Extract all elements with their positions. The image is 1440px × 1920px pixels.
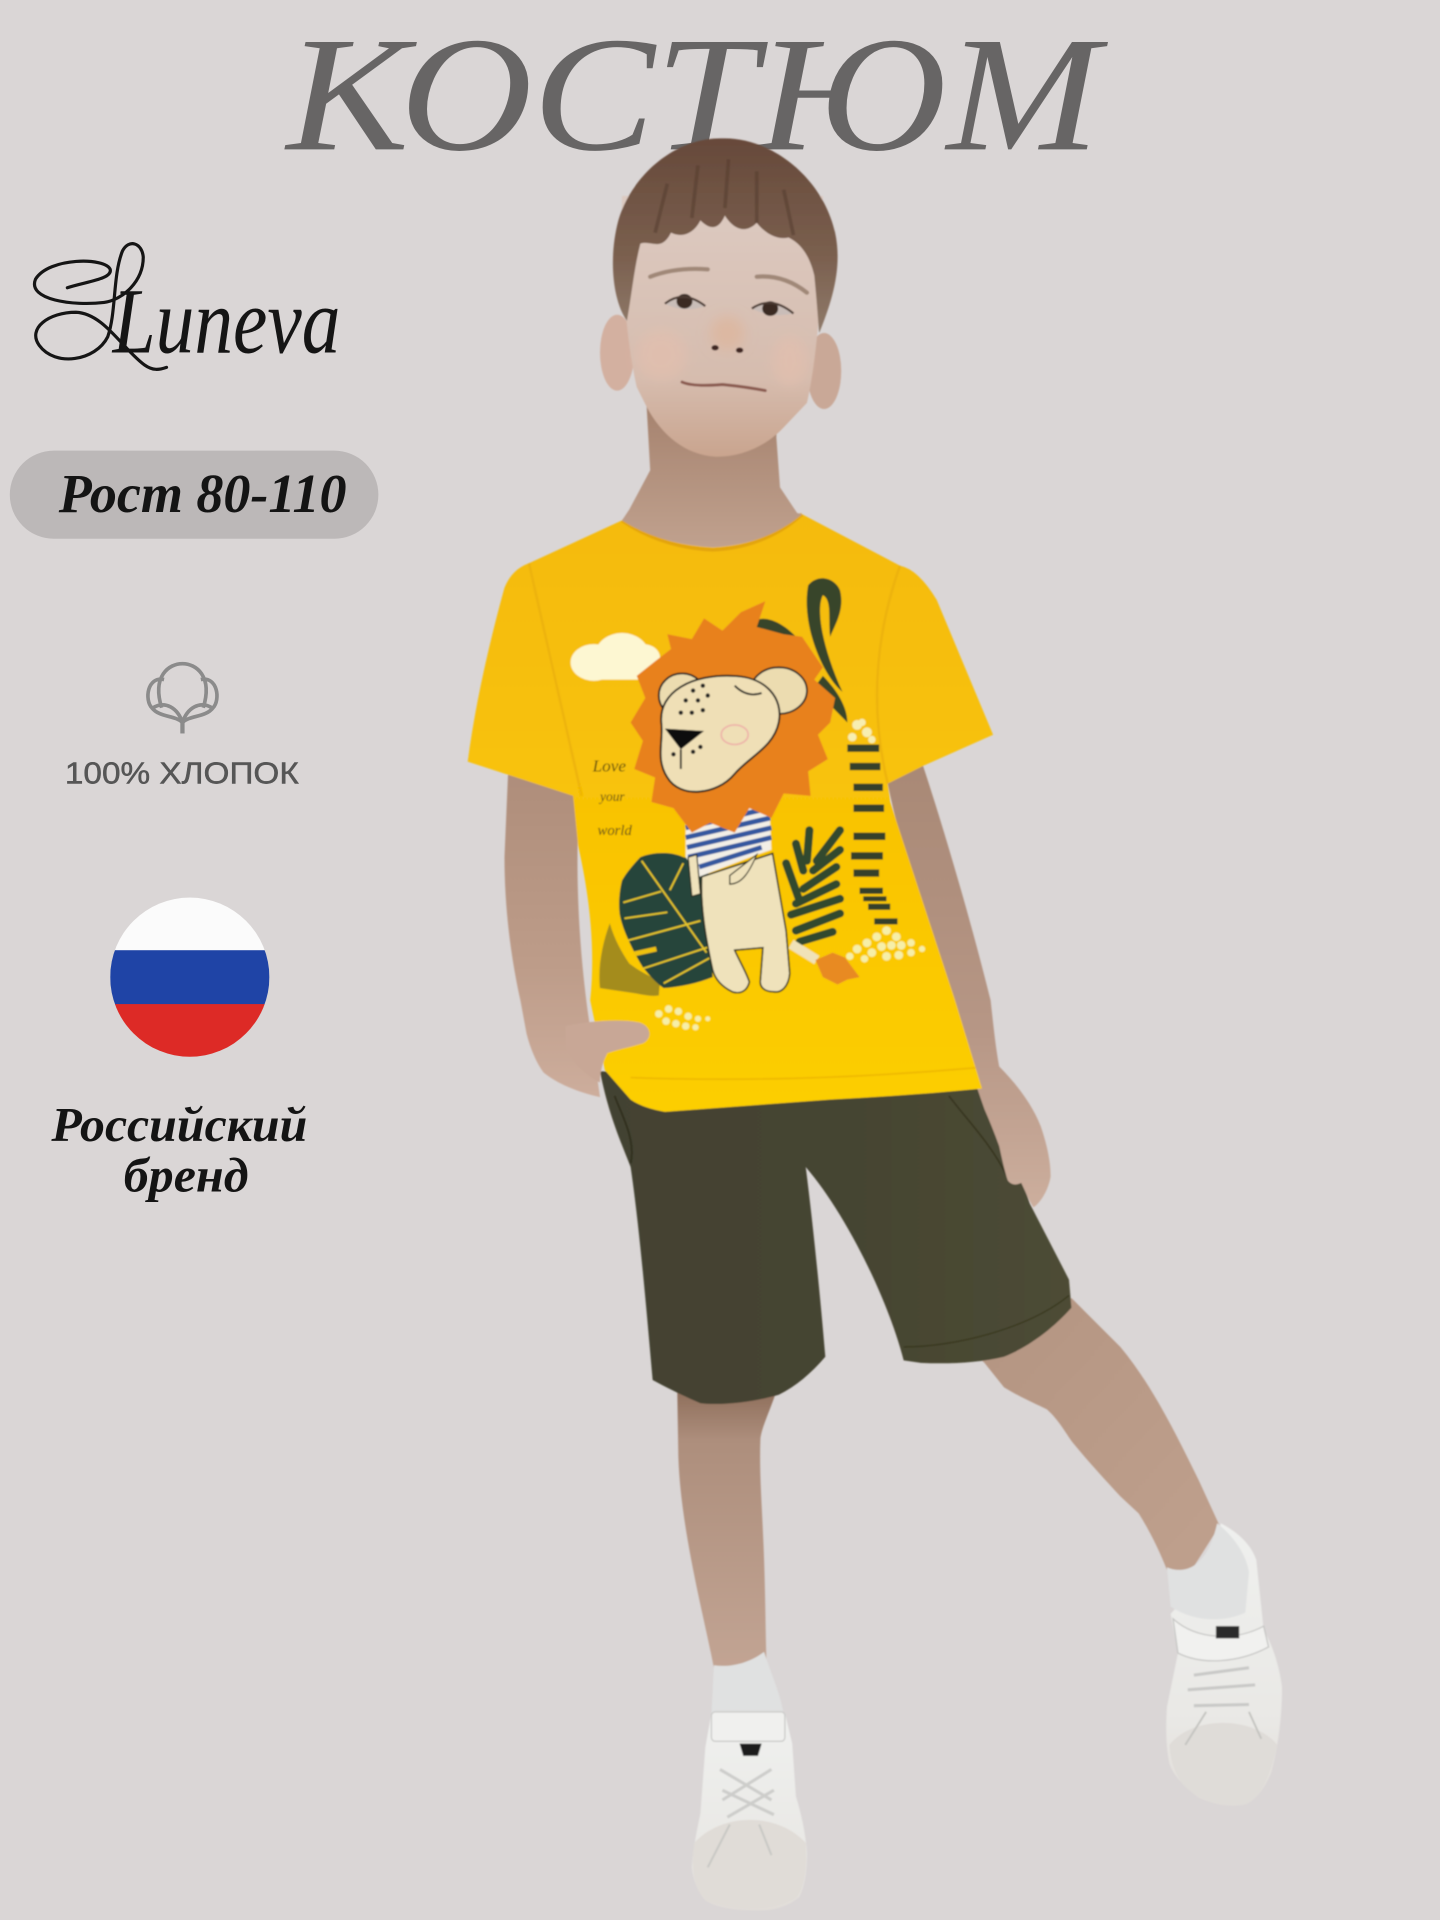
mouth xyxy=(682,382,765,391)
nose xyxy=(710,316,744,353)
raised leg xyxy=(967,1298,1220,1572)
lion ears xyxy=(659,667,807,718)
boy figure xyxy=(468,138,1282,1910)
lion body xyxy=(701,853,790,993)
raised shoe xyxy=(1166,1523,1282,1806)
icon: cotton boll xyxy=(148,664,217,733)
lion arm xyxy=(688,855,757,896)
left arm xyxy=(504,771,600,1097)
hand in pocket xyxy=(566,1021,649,1082)
left ear xyxy=(600,315,634,391)
eyebrows xyxy=(650,269,807,293)
front shoe xyxy=(692,1712,807,1910)
head xyxy=(600,138,841,457)
standing leg xyxy=(677,1384,779,1668)
dot clusters xyxy=(655,926,925,1030)
monstera leaf xyxy=(619,853,713,988)
brand logo xyxy=(34,244,340,374)
icon: russian flag xyxy=(110,898,269,1058)
tree trunk stripes xyxy=(847,744,898,924)
lion tail xyxy=(791,944,817,960)
cloud xyxy=(571,633,660,681)
left eye xyxy=(665,294,705,309)
lion tail tuft xyxy=(816,953,860,984)
striped shirt xyxy=(686,798,771,877)
title: КОСТЮМ xyxy=(284,4,1109,185)
right eye xyxy=(752,301,793,316)
russian brand caption: бренд xyxy=(124,1147,249,1202)
raised sock xyxy=(1167,1523,1249,1619)
shirt print: lion and jungle xyxy=(571,578,925,1030)
russian brand caption: Российский xyxy=(50,1097,307,1152)
standing sock xyxy=(711,1652,784,1717)
right arm xyxy=(888,759,1051,1207)
olive leaf xyxy=(599,923,660,996)
trunk top dots xyxy=(848,719,876,743)
neck xyxy=(622,404,802,547)
tree leaves xyxy=(749,578,847,722)
brand logo: Luneva xyxy=(111,271,340,374)
small slogan: world xyxy=(598,823,632,839)
small slogan: your xyxy=(598,789,625,804)
small slogan xyxy=(592,756,632,839)
t-shirt xyxy=(468,514,993,1112)
face xyxy=(622,196,823,457)
right ear xyxy=(807,333,841,409)
cheeks xyxy=(637,331,807,386)
hair xyxy=(613,138,838,333)
material label: 100% ХЛОПОК xyxy=(65,757,299,791)
height badge xyxy=(10,451,378,539)
shorts xyxy=(600,1071,1071,1404)
lion mane xyxy=(631,601,835,833)
height badge: Рост 80-110 xyxy=(58,463,347,524)
small slogan: Love xyxy=(592,756,626,775)
lion face xyxy=(661,676,780,792)
palm leaf xyxy=(786,830,840,942)
